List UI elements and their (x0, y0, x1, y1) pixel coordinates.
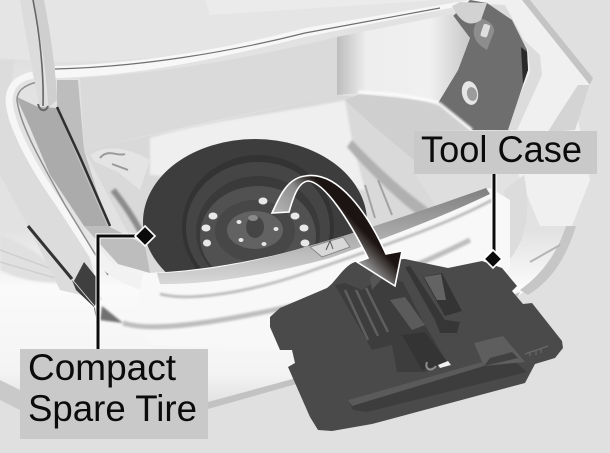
textured tread strip (157, 188, 490, 284)
trunk sill and bumper lip (123, 188, 510, 350)
trunk side wall (337, 14, 470, 103)
tire tread (143, 139, 367, 305)
label: Compact Spare Tire: Compact (28, 347, 177, 388)
label: Tool Case: Tool Case (421, 129, 582, 170)
trunk lid underside (0, 0, 490, 78)
leader line: tool case (484, 174, 502, 268)
label: Compact Spare Tire: Spare Tire (28, 388, 197, 429)
long slot (348, 360, 527, 412)
lip filler covering the lower tire (135, 188, 510, 350)
curved arrow from tire to tool case (272, 175, 402, 286)
lid inner panel (80, 37, 337, 150)
trunk floor (84, 95, 510, 275)
wheel hub (215, 200, 295, 262)
spare tire (143, 139, 367, 305)
right side dark wall panel (438, 0, 542, 130)
case body (270, 259, 563, 431)
embossed logo (525, 346, 548, 356)
lug holes (202, 198, 310, 246)
tool cavities (335, 275, 447, 372)
lid support hinge arm (20, 0, 57, 110)
trunk opening gutter, left side (0, 60, 160, 335)
label: Compact Spare Tire (20, 347, 208, 439)
jack bracket (310, 237, 350, 257)
tool case (270, 259, 563, 431)
leader line: compact spare tire (98, 226, 155, 349)
wheel rim (182, 155, 334, 299)
